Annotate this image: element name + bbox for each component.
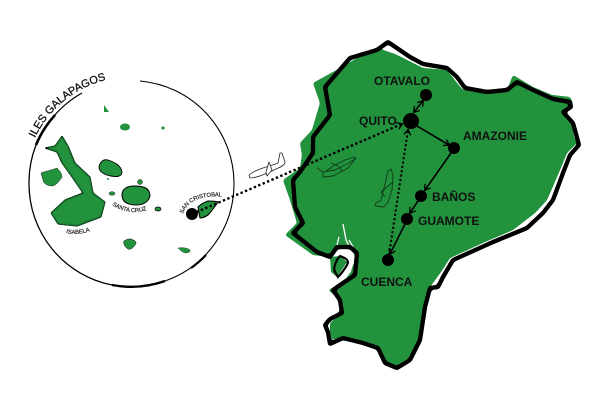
route: Cuenca to Quito by air: [389, 130, 408, 255]
estuary and river: [330, 224, 354, 281]
mainland Ecuador: green land: [283, 47, 577, 366]
small islands: [104, 105, 190, 253]
estuary island outline: [334, 256, 348, 277]
Galapagos circle: [29, 81, 234, 287]
flight route: San Cristobal to Quito: [192, 124, 402, 214]
icon: plane over ocean: [249, 153, 285, 178]
stop labels: CUENCA: [361, 275, 413, 289]
circle title: ILES GALAPAGOS: [28, 73, 106, 138]
stop labels: AMAZONIE: [463, 129, 527, 143]
stop labels: BAÑOS: [432, 189, 475, 204]
stop labels: [359, 74, 527, 289]
island labels: [66, 192, 222, 234]
island labels: ISABELA: [66, 228, 90, 234]
stop labels: QUITO: [359, 114, 397, 128]
stop markers: [186, 89, 460, 266]
island: Santiago: [99, 160, 122, 177]
stop labels: GUAMOTE: [418, 214, 479, 228]
island labels: SAN CRISTOBAL: [180, 192, 222, 214]
island: Santa Cruz: [122, 186, 150, 205]
mainland Ecuador: black hand-drawn outline: [293, 42, 579, 368]
island labels: SANTA CRUZ: [112, 202, 147, 212]
icon: plane over land, horizontal: [317, 157, 356, 177]
stop labels: OTAVALO: [374, 74, 430, 88]
island: San Cristobal: [198, 201, 218, 218]
icon: plane over land, vertical: [375, 169, 393, 207]
road routes: [390, 101, 451, 254]
island: Fernandina: [41, 168, 62, 186]
island: Isabela: [45, 136, 105, 226]
